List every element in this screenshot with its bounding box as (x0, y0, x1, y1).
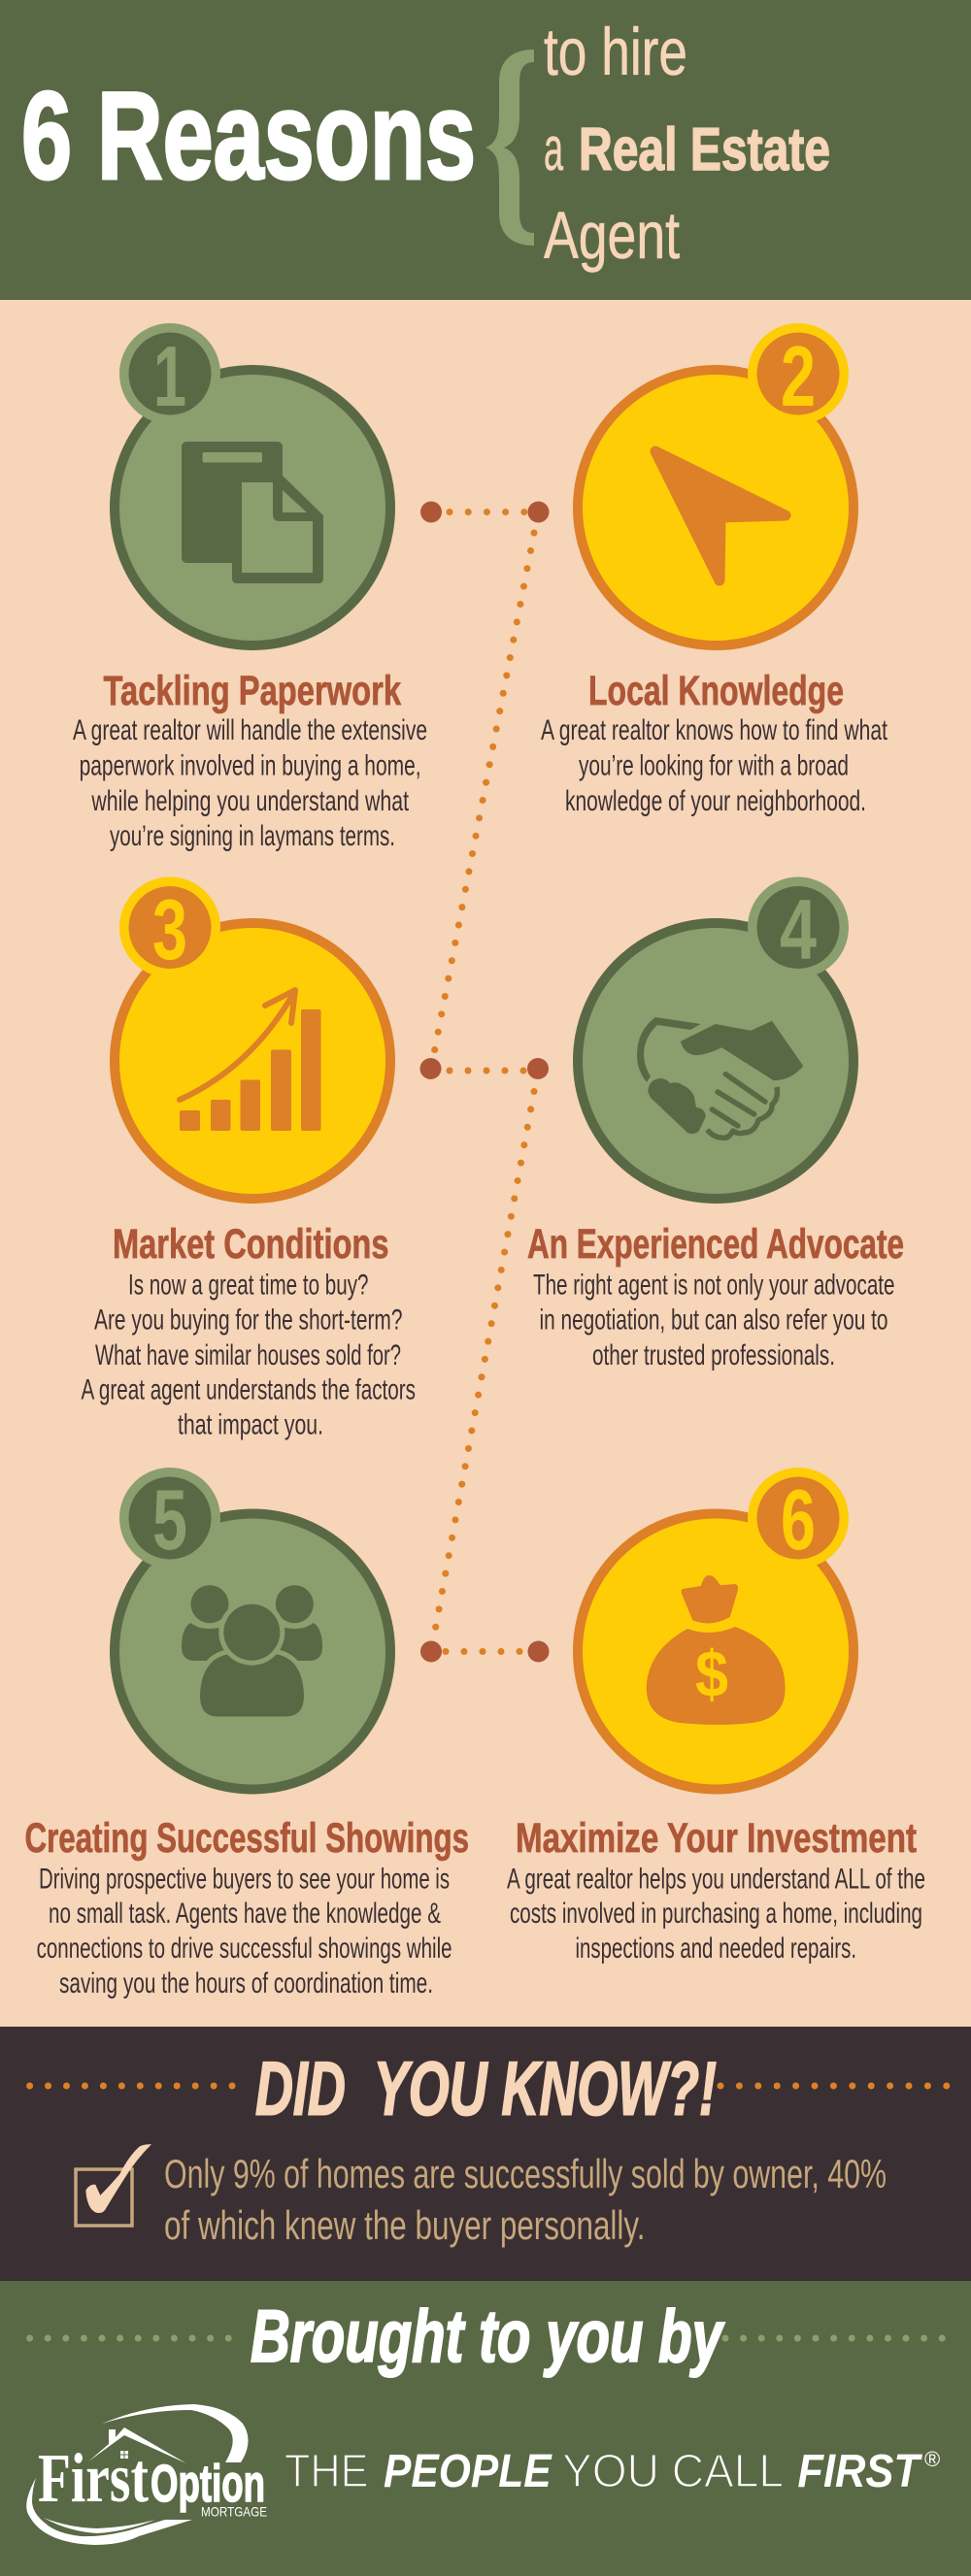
panel: reason 5 (25, 1468, 469, 1999)
connector: dotted path between reasons (419, 501, 550, 1662)
tagline: the people you call first: YOU CALL (562, 2446, 784, 2497)
text: reason 1 description: while helping you understand what (91, 785, 409, 817)
circle 6 (578, 1514, 854, 1790)
badge 6: 6 (781, 1471, 816, 1568)
subtitle: a Real Estate: a (544, 114, 563, 183)
text: reason 3 description: A great agent understands the factors (82, 1374, 416, 1405)
subtitle: a Real Estate: Real Estate (579, 116, 830, 183)
text: reason 4 description (533, 1270, 895, 1371)
heading: brought to you by: Brought to you by (251, 2295, 725, 2378)
circle 2 (578, 370, 854, 645)
subtitle: to hire: to hire (544, 15, 687, 89)
text: reason 3 description: What have similar houses sold for? (95, 1339, 401, 1371)
text: reason 5 description: Driving prospective buyers to see your home is (39, 1864, 450, 1895)
heading: did you know: DID YOU KNOW?! (255, 2046, 717, 2131)
badge 1: 1 (153, 328, 186, 424)
text: reason 1 description: paperwork involved in buying a home, (80, 749, 421, 782)
text: reason 1 description (73, 714, 427, 852)
badge 4: 4 (780, 881, 817, 977)
panel: reason 6 (507, 1468, 925, 1965)
icon: rising bar chart with arrow (180, 990, 320, 1131)
icon: handshake (637, 1017, 803, 1138)
text: reason 5 description: connections to drive successful showings while (37, 1932, 452, 1965)
text: reason 3 description: Is now a great time to buy? (128, 1270, 369, 1301)
text: reason 1 description: you’re signing in laymans terms. (110, 820, 395, 852)
panel: did you know (0, 2027, 971, 2281)
text: did you know fact: of which knew the buyer personally. (164, 2202, 645, 2248)
badge 2 (748, 323, 849, 424)
text: reason 3 description (82, 1270, 416, 1441)
panel: reason 2 (541, 323, 887, 817)
subtitle: a Real Estate (544, 114, 830, 183)
text: reason 3 description: Are you buying for the short-term? (94, 1305, 402, 1337)
icon: curly brace (486, 50, 534, 246)
panel: reason 3 (82, 877, 416, 1441)
circle 3 (115, 923, 390, 1199)
heading: Tackling Paperwork: Tackling Paperwork (103, 668, 401, 714)
circle 1 (115, 370, 390, 645)
icon: money bag: $ (695, 1637, 728, 1711)
text: reason 6 description (507, 1864, 925, 1965)
badge 4 (748, 877, 849, 978)
badge 3: 3 (152, 881, 187, 977)
text: reason 1 description: A great realtor will handle the extensive (73, 714, 427, 746)
text: reason 5 description (37, 1864, 452, 1999)
text: did you know fact (164, 2151, 887, 2248)
header banner (0, 0, 971, 300)
tagline: the people you call first (285, 2446, 940, 2497)
text: reason 2 description (541, 714, 887, 817)
badge 3 (119, 877, 220, 978)
icon: navigation arrow (655, 451, 786, 580)
icon: documents (182, 442, 323, 583)
tagline: the people you call first: PEOPLE (384, 2446, 552, 2497)
panel: footer (0, 2281, 971, 2576)
badge 5 (119, 1468, 220, 1569)
badge 1 (119, 323, 220, 424)
text: reason 4 description: other trusted professionals. (592, 1339, 835, 1371)
logo: First Option Mortgage: Option (151, 2455, 265, 2513)
text: reason 2 description: you’re looking for with a broad (579, 749, 849, 782)
tagline: the people you call first: FIRST (797, 2446, 922, 2497)
badge 6 (748, 1468, 849, 1569)
icon: group of people (182, 1585, 322, 1716)
panel: reason 4 (527, 877, 904, 1371)
logo: First Option Mortgage (26, 2404, 267, 2545)
tagline: the people you call first: THE (285, 2446, 369, 2497)
text: reason 5 description: saving you the hours of coordination time. (59, 1967, 433, 1999)
subtitle: Agent: Agent (544, 198, 680, 273)
title: 6 Reasons: 6 Reasons (21, 67, 476, 206)
circle 4 (578, 923, 854, 1199)
text: reason 3 description: that impact you. (178, 1409, 323, 1441)
logo: First Option Mortgage: First (38, 2439, 149, 2517)
heading: Local Knowledge: Local Knowledge (588, 668, 844, 714)
heading: Creating Successful Showings: Creating Successful Showings (25, 1815, 469, 1862)
badge 2: 2 (781, 328, 816, 424)
tagline: the people you call first: ® (924, 2447, 940, 2471)
heading: Market Conditions: Market Conditions (113, 1221, 388, 1268)
panel: reason 1 (73, 323, 427, 852)
icon: checked box (76, 2144, 151, 2226)
text: reason 5 description: no small task. Agents have the knowledge & (49, 1898, 441, 1930)
badge 5: 5 (152, 1471, 187, 1568)
icon: money bag (647, 1575, 786, 1725)
logo: First Option Mortgage: MORTGAGE (201, 2504, 267, 2520)
circle 5 (115, 1514, 390, 1790)
background: peach panel (0, 300, 971, 2028)
